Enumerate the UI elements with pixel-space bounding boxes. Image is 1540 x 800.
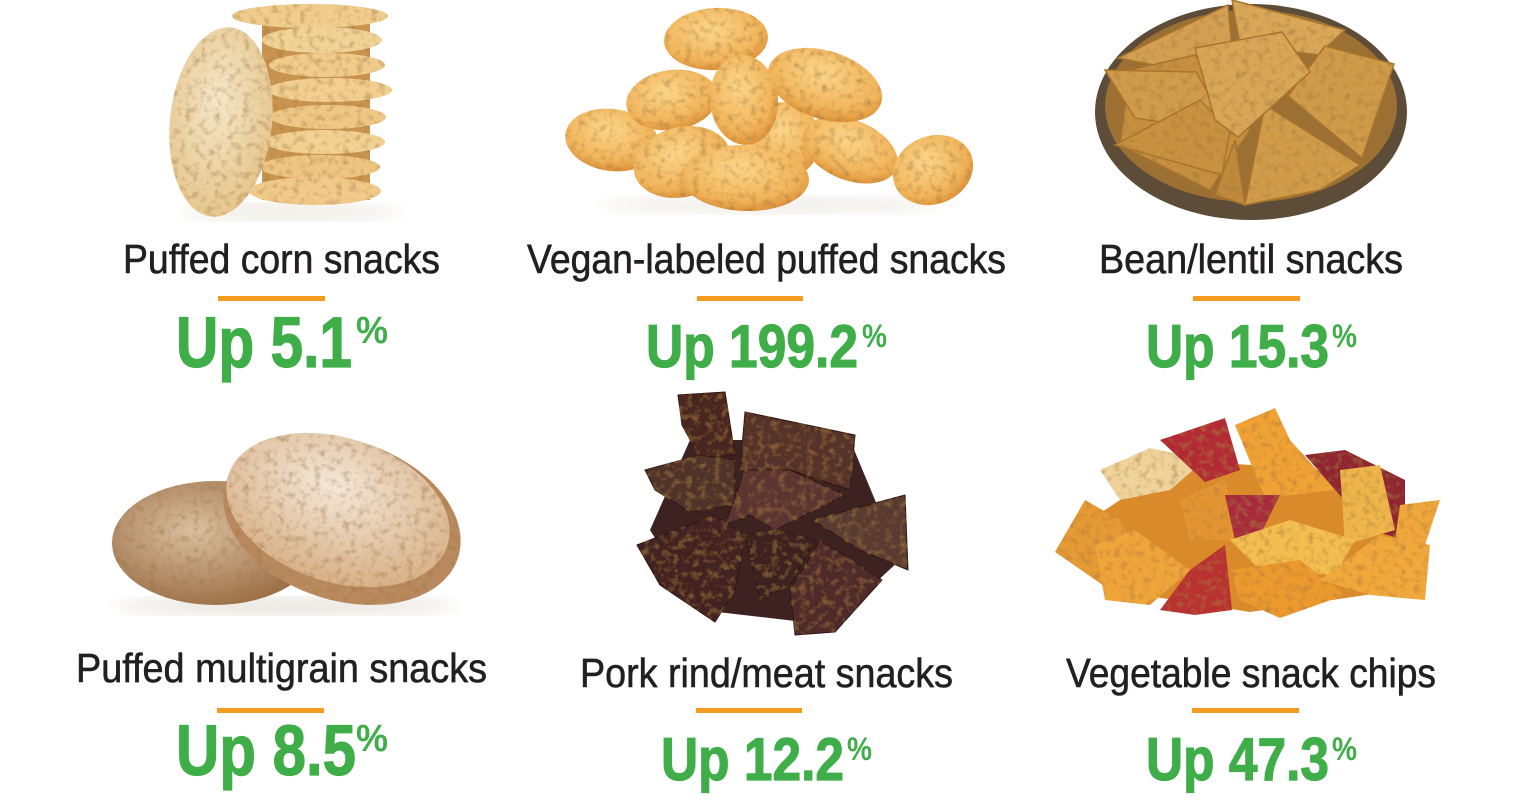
value: pork rind/meat snacks: Up 12.2 (661, 726, 844, 793)
divider: puffed corn snacks (218, 296, 325, 301)
divider: vegan-labeled puffed snacks (697, 296, 803, 301)
label: bean/lentil snacks: Bean/lentil snacks (1099, 236, 1403, 282)
value: pork rind/meat snacks: % (847, 731, 872, 767)
label: vegan-labeled puffed snacks: Vegan-labeled puffed snacks (527, 236, 1006, 282)
value: vegan-labeled puffed snacks: % (862, 318, 887, 354)
value: puffed multigrain snacks: % (356, 718, 388, 760)
value: puffed corn snacks: Up 5.1 (176, 304, 352, 383)
image: puffed corn snacks (160, 4, 400, 222)
image: vegetable snack chips (1055, 408, 1440, 618)
image: puffed multigrain snacks (112, 406, 483, 634)
label: vegetable snack chips: Vegetable snack chips (1066, 650, 1436, 696)
value: vegetable snack chips: Up 47.3 (1146, 726, 1329, 793)
divider: bean/lentil snacks (1193, 296, 1300, 301)
value: bean/lentil snacks: Up 15.3 (1146, 313, 1329, 380)
image: vegan-labeled puffed snacks (561, 5, 984, 217)
divider: pork rind/meat snacks (696, 708, 802, 713)
label: puffed corn snacks: Puffed corn snacks (123, 236, 440, 282)
value: puffed corn snacks: % (356, 310, 388, 352)
value: bean/lentil snacks: % (1332, 318, 1357, 354)
image: pork rind/meat snacks (637, 392, 908, 635)
value: vegan-labeled puffed snacks: Up 199.2 (646, 313, 858, 380)
divider: vegetable snack chips (1192, 708, 1299, 713)
value: vegetable snack chips: % (1332, 731, 1357, 767)
value: puffed multigrain snacks: Up 8.5 (176, 712, 356, 791)
divider: puffed multigrain snacks (217, 708, 324, 713)
image: bean/lentil snacks (1095, 0, 1407, 220)
label: puffed multigrain snacks: Puffed multigrain snacks (76, 645, 487, 691)
label: pork rind/meat snacks: Pork rind/meat snacks (580, 650, 953, 696)
